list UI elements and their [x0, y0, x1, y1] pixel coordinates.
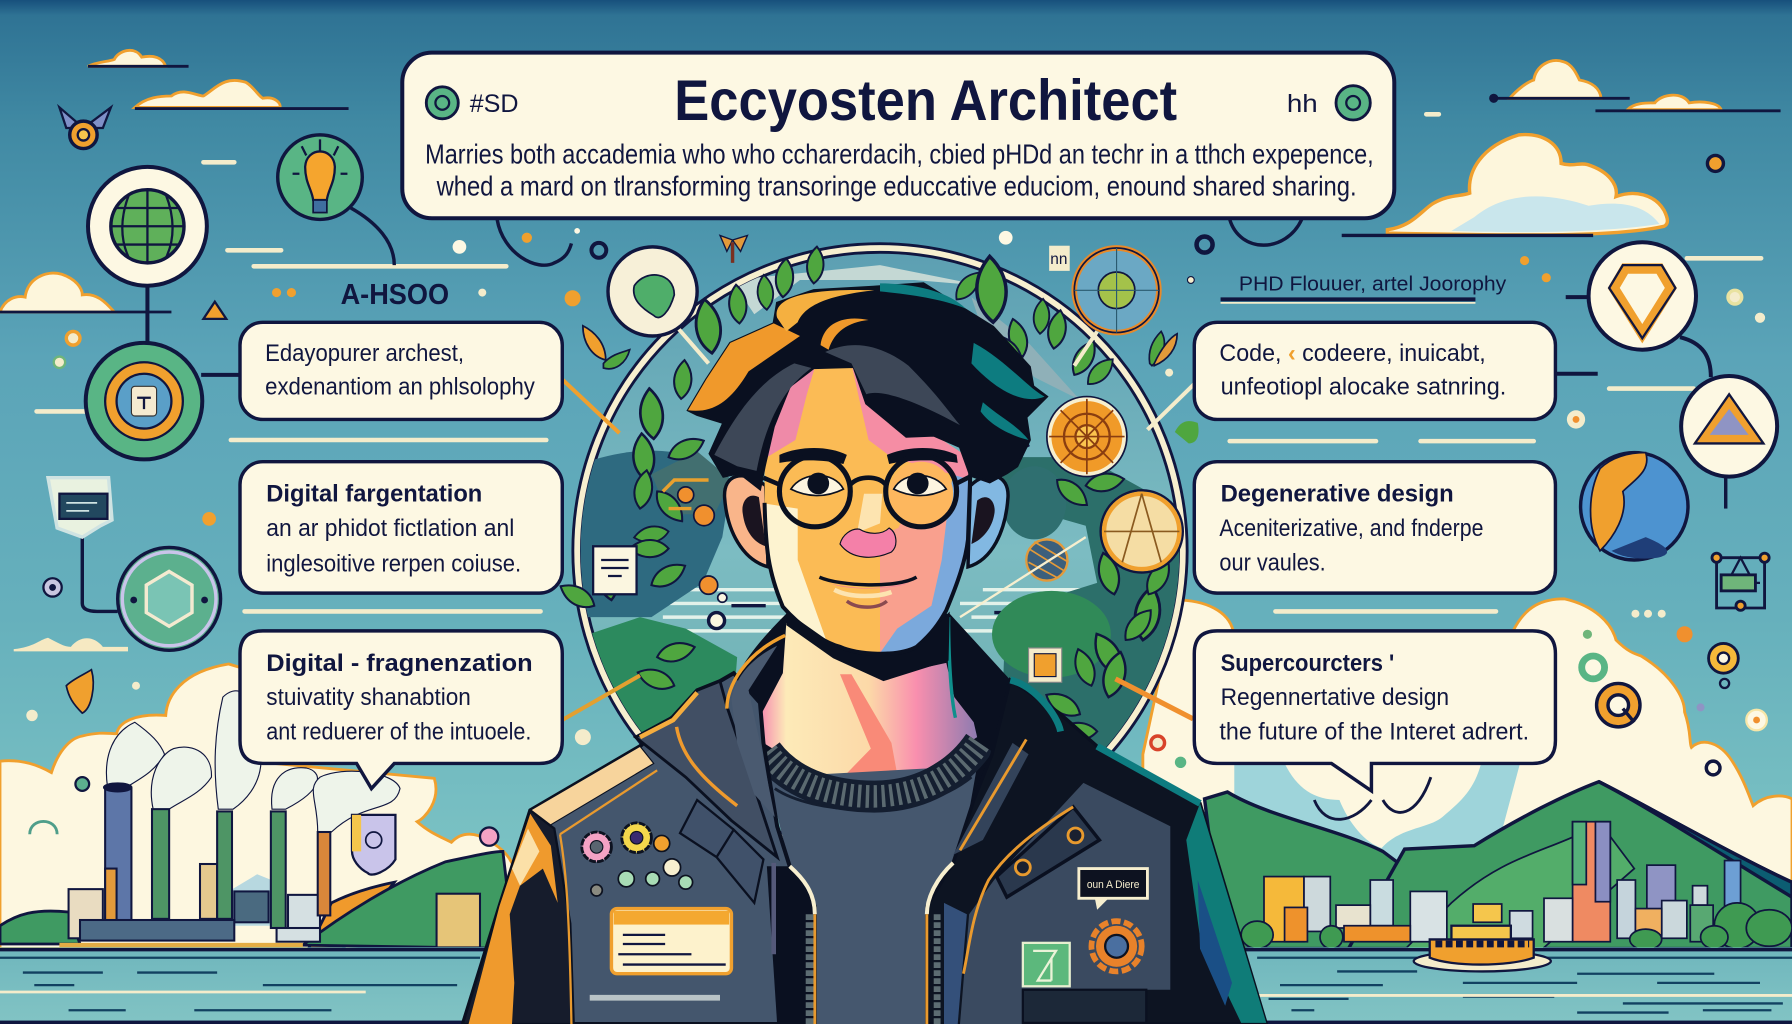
- hood flap: [635, 681, 777, 857]
- right bubble 3: [1194, 631, 1555, 791]
- leaf sprig right: [1149, 331, 1199, 443]
- right bubble 1 text: Code, ‹ codeere, inuicabt,: [1219, 340, 1486, 367]
- photo card: [1029, 648, 1062, 682]
- leaf wreath: [556, 246, 1175, 740]
- left bubble 3 text: stuivatity shanabtion: [266, 684, 471, 711]
- ferry: [1414, 926, 1551, 971]
- warning triangle: [203, 302, 226, 319]
- right sleeve: [1186, 803, 1266, 1023]
- cloud: top right small: [1489, 61, 1630, 103]
- lapel rectangles: [680, 800, 763, 903]
- tag left: [426, 87, 519, 119]
- left bubble 2 text: inglesoitive rerpen coiuse.: [266, 550, 521, 577]
- right bubble 1 text: [1219, 340, 1506, 400]
- smoke plumes: [106, 691, 400, 832]
- neck: [760, 623, 977, 786]
- right hood strip: [953, 743, 1029, 855]
- hair grey strands: [714, 345, 960, 471]
- tag right: hh: [1287, 90, 1318, 118]
- face cream left: [766, 504, 826, 639]
- right bubble 1: [1194, 322, 1555, 419]
- chin shadow: [786, 611, 950, 681]
- chimney 4: [271, 811, 286, 928]
- icon: gear badge: [86, 343, 202, 459]
- nose shine: [857, 494, 882, 533]
- neck shading: [834, 674, 899, 786]
- insect: bee top left: [59, 107, 111, 149]
- cloud: top right flat: [1595, 95, 1781, 111]
- sleeve blue shade: [1198, 880, 1232, 1006]
- shield badge on smoke: [352, 815, 395, 875]
- grey hood side: [731, 646, 777, 817]
- right bubble 2 text: Degenerative design: [1221, 481, 1454, 508]
- subtitle lines: Marries both accademia who who ccharerdacih, cbied pHDd an techr in a tthch expepence,: [425, 138, 1374, 169]
- forehead pink left: [768, 369, 814, 456]
- hood interior: [727, 614, 1010, 834]
- right bubble 2 text: Aceniterizative, and fnderpe: [1219, 515, 1483, 542]
- left sleeve: [463, 810, 574, 1024]
- shoulder highlight: [530, 746, 654, 827]
- forehead pink right: [851, 363, 971, 480]
- chimney 5: [318, 832, 330, 915]
- icon: hexagon molecule: [118, 547, 221, 650]
- jacket details: [582, 823, 1147, 998]
- right bubble 2: [1194, 462, 1555, 593]
- left bubble 2: [240, 462, 562, 593]
- jacket buttons: [1015, 828, 1083, 875]
- eyes: [791, 473, 946, 496]
- left bubble 3 text: ant reduerer of the intuoele.: [266, 718, 531, 745]
- sky gap beneath right bubble: [1234, 763, 1520, 891]
- subtitle lines: [425, 138, 1374, 201]
- cloud: top left small: [88, 50, 189, 66]
- sweater: [768, 766, 977, 1024]
- left bubble 1 text: [265, 340, 535, 400]
- connector: right top: [1147, 383, 1195, 430]
- hood edge: [727, 635, 785, 709]
- nose: [840, 528, 896, 557]
- header connector arcs: [351, 208, 1302, 265]
- face: [764, 368, 968, 652]
- yarn ball: [960, 537, 1086, 617]
- hair orange strands: [688, 323, 800, 411]
- right skyline: [1264, 822, 1741, 942]
- factory: [59, 783, 480, 947]
- person: [463, 283, 1266, 1024]
- right bubble 1 text: unfeotiopl alocake satnring.: [1221, 373, 1506, 400]
- zipper inner: [767, 863, 815, 1024]
- face salmon right: [880, 520, 946, 652]
- right bubble 3 text: [1219, 650, 1529, 745]
- hair: [688, 283, 1047, 489]
- zipper right: [927, 863, 967, 1024]
- icon: monitor: [48, 478, 112, 537]
- headset outline: [30, 821, 57, 834]
- large lower left cream cloud: [0, 664, 514, 949]
- cloud: large right: [1342, 135, 1667, 235]
- pin dots: [591, 835, 693, 896]
- insect: top middle: [720, 235, 747, 263]
- face outline: [765, 473, 970, 654]
- hair teal: [880, 283, 1045, 440]
- header panel: [402, 53, 1394, 218]
- hair orange top: [777, 290, 874, 331]
- icon: map pin: [1589, 242, 1696, 350]
- right bubble 2 text: [1219, 481, 1483, 576]
- connector: left top: [562, 379, 619, 433]
- teal shoulder edges: [1010, 680, 1200, 803]
- leaf sprig left: [583, 326, 630, 369]
- glasses: [763, 456, 970, 527]
- chimney 2: [152, 809, 169, 919]
- orange seams: [960, 739, 1073, 974]
- sweater collar: [767, 743, 979, 809]
- right lens tint: [889, 462, 953, 526]
- section label left: A-HSOO: [341, 279, 449, 311]
- icon: network: [1712, 553, 1769, 610]
- face blue edge: [880, 476, 968, 652]
- name badge: [611, 909, 731, 974]
- right bubble 3 text: Regennertative design: [1221, 684, 1449, 711]
- cloud: top left wide: [135, 80, 349, 109]
- note card: [593, 546, 637, 594]
- right panel: [960, 783, 1170, 1024]
- panel orange seam: [560, 770, 657, 1024]
- orange gear: [1091, 921, 1142, 971]
- pin: yellow gear: [622, 823, 651, 853]
- connector: right bottom: [1115, 679, 1193, 719]
- jacket left: [463, 635, 815, 1024]
- left bubble 3: [240, 631, 562, 789]
- chimney 3: [217, 811, 232, 919]
- right trees: [1241, 903, 1792, 950]
- connector: left bottom: [562, 675, 640, 720]
- scattered dots: nn: [1050, 251, 1067, 268]
- medallion: compass: [1074, 248, 1159, 333]
- cloud: small left low: [14, 638, 128, 651]
- tag right: [1287, 86, 1370, 120]
- left bubble 3 text: [266, 650, 533, 745]
- pocket: [1023, 990, 1146, 1023]
- ears: [725, 476, 1008, 567]
- right bubble 3 text: Supercourcters ': [1221, 650, 1394, 677]
- green badge: [1023, 943, 1070, 986]
- ring medallions and connectors: [562, 247, 1195, 720]
- left bubble 3 text: Digital - fragnenzation: [266, 650, 533, 677]
- mouth: [819, 577, 917, 607]
- left bubble 2 text: Digital fargentation: [266, 481, 482, 508]
- circuit nodes: [663, 480, 727, 629]
- left bubble 2 text: [266, 481, 521, 577]
- icon: globe: [88, 167, 207, 286]
- medallion: orange grid: [1047, 397, 1127, 477]
- right flap: [997, 807, 1099, 897]
- right icon chain: [1555, 242, 1777, 727]
- scattered dots: [26, 155, 1767, 846]
- medallion: gold: [1101, 490, 1183, 573]
- right bubble 2 text: our vaules.: [1219, 549, 1326, 576]
- cloud: left middle: [0, 273, 171, 312]
- subtitle lines: whed a mard on tlransforming transoringe educcative educiom, enound shared sharing.: [436, 170, 1357, 201]
- left bubble 1 text: exdenantiom an phlsolophy: [265, 373, 535, 400]
- icon: target: [1597, 683, 1640, 727]
- tag left: #SD: [470, 90, 519, 118]
- icon: orange ring pendant: [1709, 643, 1738, 688]
- teal neck strand: [949, 617, 955, 718]
- insect: lower left: [66, 670, 93, 713]
- water: [0, 947, 1792, 1024]
- hair orange forelock: [821, 319, 869, 350]
- right mountains: [1205, 782, 1792, 949]
- horizontal light strips: [34, 112, 1763, 614]
- inner scene: [571, 265, 1189, 754]
- icon: light bulb: [278, 135, 362, 219]
- left bubble 2 text: an ar phidot fictlation anl: [266, 515, 514, 542]
- left hills: [0, 851, 514, 949]
- title: Eccyosten Architect: [674, 69, 1177, 133]
- jacket right: [927, 617, 1266, 1024]
- chimney 1: [104, 783, 131, 922]
- connector: medallions: [679, 329, 1097, 366]
- medallion: earth: [608, 247, 697, 336]
- icon: ring node: [43, 578, 62, 597]
- sky clouds: [0, 50, 1781, 651]
- icon: triangle: [1681, 376, 1777, 477]
- pin: pink gear: [582, 832, 611, 862]
- left bubble 1: [240, 322, 562, 419]
- eyebrows: [779, 448, 958, 464]
- section label right: PHD Flouuer, artel Joorophy: [1239, 272, 1507, 295]
- pen pocket: [590, 995, 720, 1000]
- right bubble 3 text: the future of the Interet adrert.: [1219, 718, 1529, 745]
- icon: earth globe: [1581, 453, 1726, 560]
- portrait ring with scene: [571, 248, 1189, 854]
- left icon chain: [43, 135, 362, 650]
- right bubble squiggle: [1314, 777, 1431, 819]
- left bubble 1 text: Edayopurer archest,: [265, 340, 464, 367]
- speech tag: [1079, 869, 1147, 910]
- speech tag: oun A Diere: [1087, 879, 1139, 891]
- large lower right cream cloud: [1143, 599, 1792, 914]
